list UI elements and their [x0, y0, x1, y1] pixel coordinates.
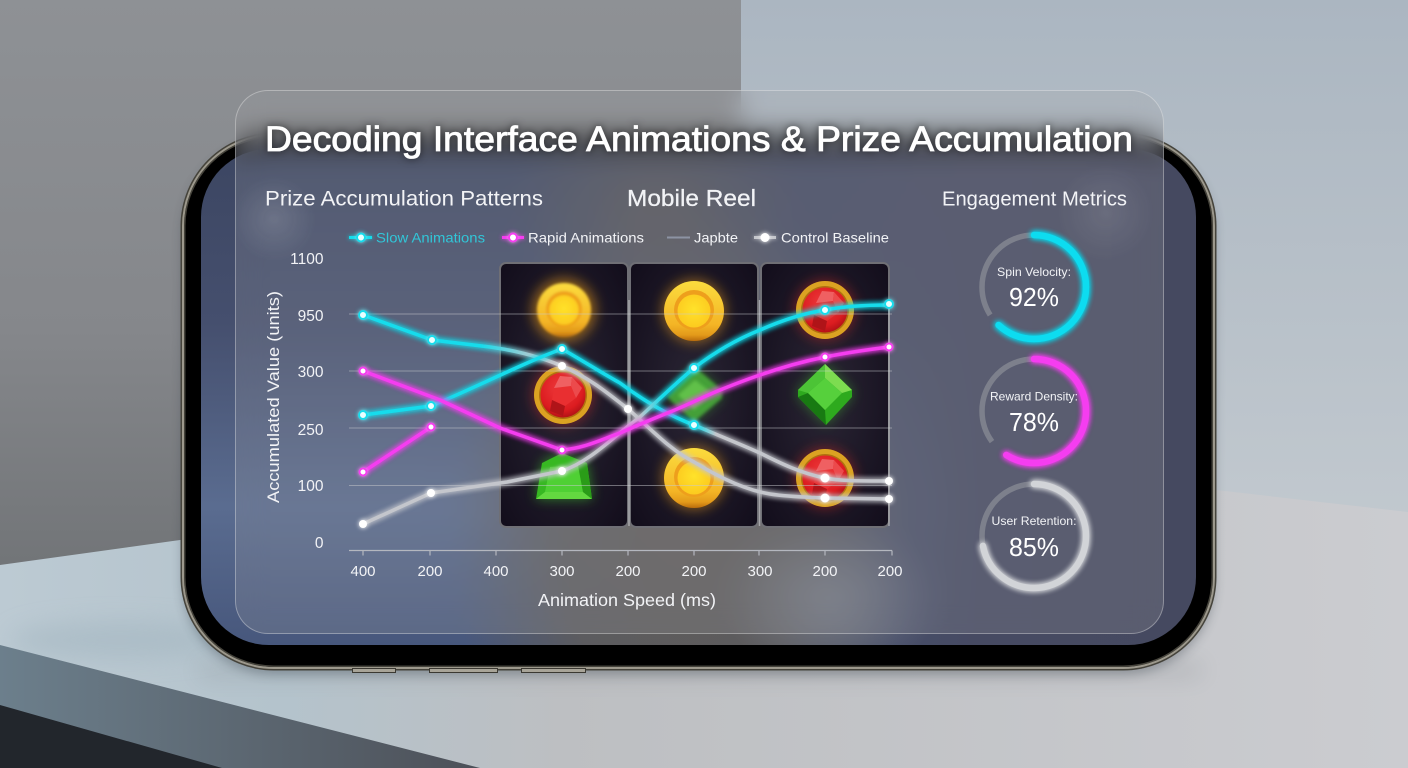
chart grid lines [349, 314, 892, 486]
y axis labels: 250 [298, 422, 324, 439]
legend: japbte [667, 230, 738, 246]
legend [349, 230, 889, 246]
legend: rapid animations: Rapid Animations [528, 230, 644, 246]
legend: slow animations: Slow Animations [376, 230, 485, 246]
x axis labels: 200 [417, 563, 443, 580]
x axis labels: 400 [350, 563, 376, 580]
phone body [182, 134, 1215, 669]
series: upper slow line fading to grey [363, 315, 889, 499]
chart: prize accumulation line chart [264, 230, 903, 610]
gauge: user retention [982, 484, 1086, 588]
x axis labels: 400 [483, 563, 509, 580]
icon: ruby reel 3 bottom [794, 447, 856, 509]
y axis labels: 950 [298, 308, 324, 325]
series: rapid animations short [363, 427, 431, 472]
y axis labels: 1100 [290, 251, 324, 268]
series: rapid animations main [363, 347, 889, 450]
title: Decoding Interface Animations & Prize Accumulation [265, 120, 1133, 159]
x axis labels [350, 563, 903, 580]
heading: mobile reel: Mobile Reel [627, 185, 756, 211]
y axis labels: 100 [298, 478, 324, 495]
phone screen [200, 149, 1196, 645]
icon: blurred green gem reel 2 [667, 367, 722, 422]
heading: engagement metrics: Engagement Metrics [942, 188, 1127, 210]
x axis labels: 200 [681, 563, 707, 580]
icon: gold coin reel 2 bottom [662, 446, 726, 510]
gauge: spin velocity [982, 235, 1086, 339]
gauge: spin velocity: Spin Velocity: [997, 265, 1071, 279]
gauge: reward density: Reward Density: [990, 390, 1078, 404]
icon: green gem reel 3 [798, 364, 852, 425]
phone edge button 1 [352, 668, 396, 673]
series: baseline rising to cyan [363, 305, 889, 524]
x axis labels: 300 [549, 563, 575, 580]
y axis labels: 0 [315, 535, 324, 552]
y axis labels: 300 [298, 364, 324, 381]
icon: blurred gold coin [532, 278, 596, 342]
icon: ruby reel 1 [532, 364, 594, 426]
phone edge button 2 [429, 668, 498, 673]
series: lower slow line fading to grey [363, 349, 889, 481]
y axis labels [290, 251, 324, 552]
gauge: user retention: 85% [1009, 532, 1059, 562]
y axis title: Accumulated Value (units) [264, 291, 283, 503]
data points: white [359, 362, 893, 528]
data points: cyan [359, 300, 893, 429]
legend: control baseline: Control Baseline [781, 230, 889, 246]
heading: prize accumulation patterns: Prize Accumulation Patterns [265, 188, 543, 210]
reel dividers highlight [629, 300, 889, 526]
reel column 1 [500, 263, 628, 527]
x axis title: Animation Speed (ms) [538, 590, 716, 610]
icon: gold coin reel 2 top [662, 279, 726, 343]
data points: magenta [360, 344, 892, 476]
icon: green gem reel 1 [536, 453, 592, 499]
icon: ruby reel 3 top [794, 279, 856, 341]
reel column 2 [630, 263, 758, 527]
x axis labels: 200 [615, 563, 641, 580]
gauge: reward density: 78% [1009, 407, 1059, 437]
gauge: spin velocity: 92% [1009, 282, 1059, 312]
chart x axis [349, 550, 892, 556]
gauge: user retention: User Retention: [992, 514, 1076, 528]
panel: mobile reel slots [500, 263, 889, 527]
reel column 3 [761, 263, 889, 527]
x axis labels: 200 [812, 563, 838, 580]
legend: japbte: Japbte [694, 230, 738, 246]
gauge: reward density [982, 359, 1086, 463]
panel: frosted glass card [235, 90, 1164, 634]
x axis labels: 300 [747, 563, 773, 580]
x axis labels: 200 [877, 563, 903, 580]
phone edge button 3 [521, 668, 586, 673]
